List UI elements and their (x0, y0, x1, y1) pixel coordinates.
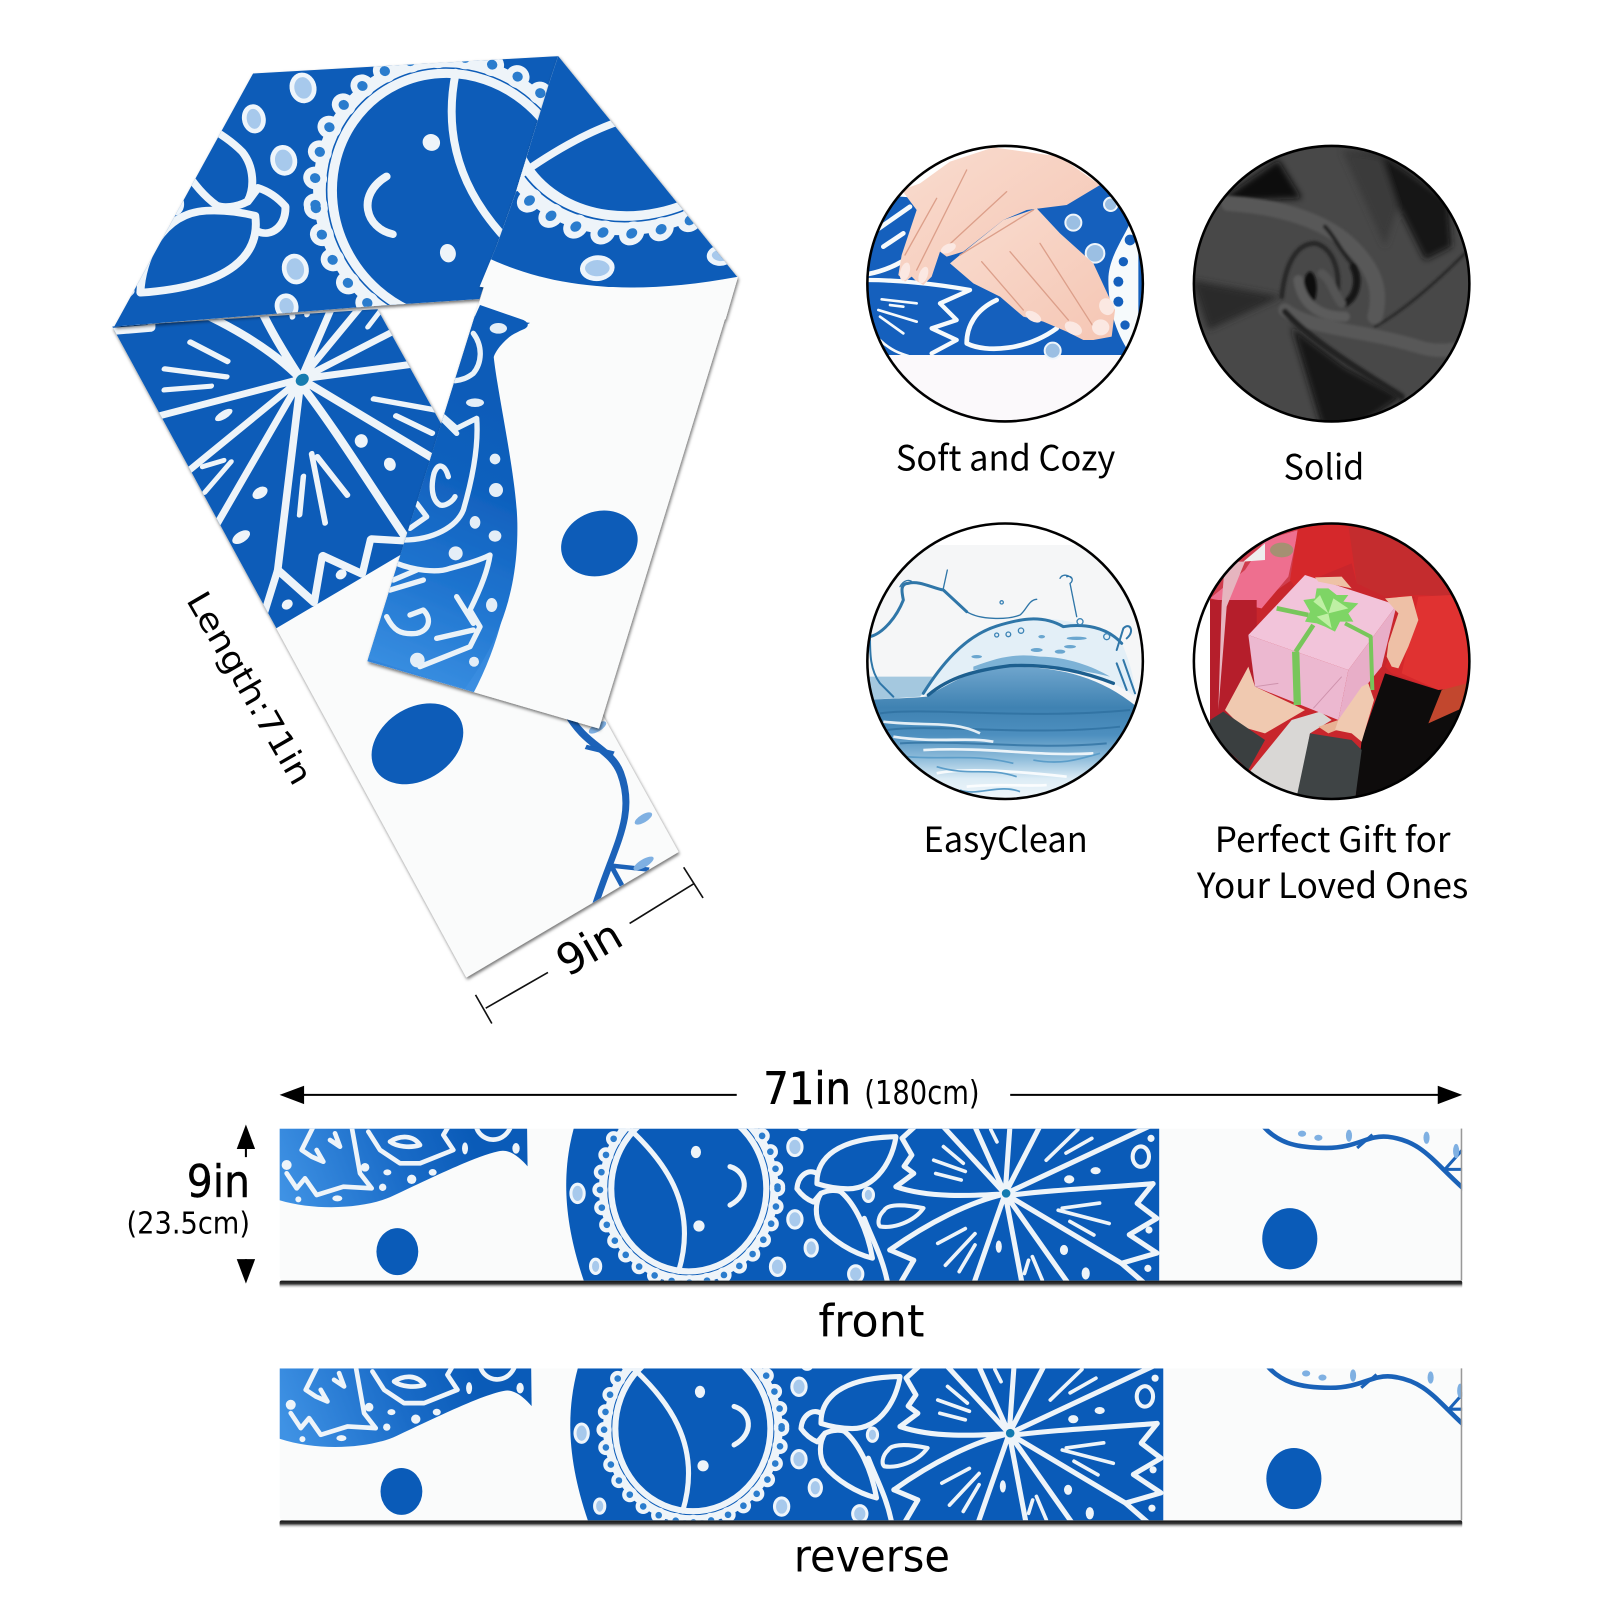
caption: Solid (1284, 440, 1364, 490)
feature: perfect gift (1194, 520, 1477, 908)
right arrowhead (1438, 1086, 1462, 1104)
length label: 71in (763, 1062, 851, 1115)
scarf top band (114, 56, 560, 331)
caption: Perfect Gift for (1215, 812, 1451, 862)
feature: solid (1192, 146, 1472, 490)
reverse strip (280, 1368, 1462, 1528)
front strip (280, 1128, 1462, 1288)
horizontal dimension: 71in (280, 1062, 1462, 1115)
up arrowhead (237, 1124, 255, 1149)
caption: Soft and Cozy (896, 430, 1115, 480)
vertical dimension: 9in (127, 1124, 255, 1284)
down arrowhead (237, 1259, 255, 1284)
reverse label: reverse (794, 1529, 950, 1582)
caption: Your Loved Ones (1196, 858, 1468, 908)
scarf right band (366, 56, 741, 732)
width label: 9in (548, 910, 631, 987)
left arrowhead (280, 1086, 304, 1104)
photo: water splash (869, 545, 1142, 798)
width label: 9in (187, 1155, 250, 1208)
front label: front (818, 1295, 924, 1348)
photo: hands on scarf (868, 148, 1142, 360)
photo: dark fabric swirl (1192, 146, 1472, 427)
length label: Length:71in (179, 585, 320, 791)
caption: EasyClean (923, 812, 1088, 862)
photo: gift being handed over (1210, 524, 1468, 798)
scarf lower band (112, 309, 681, 981)
width in cm: (23.5cm) (127, 1207, 250, 1242)
length in cm: (180cm) (864, 1074, 980, 1112)
feature: easy clean (860, 523, 1150, 862)
feature: soft and cozy (860, 146, 1152, 480)
folded scarf illustration (0, 0, 1279, 1093)
width dimension (476, 867, 703, 1023)
